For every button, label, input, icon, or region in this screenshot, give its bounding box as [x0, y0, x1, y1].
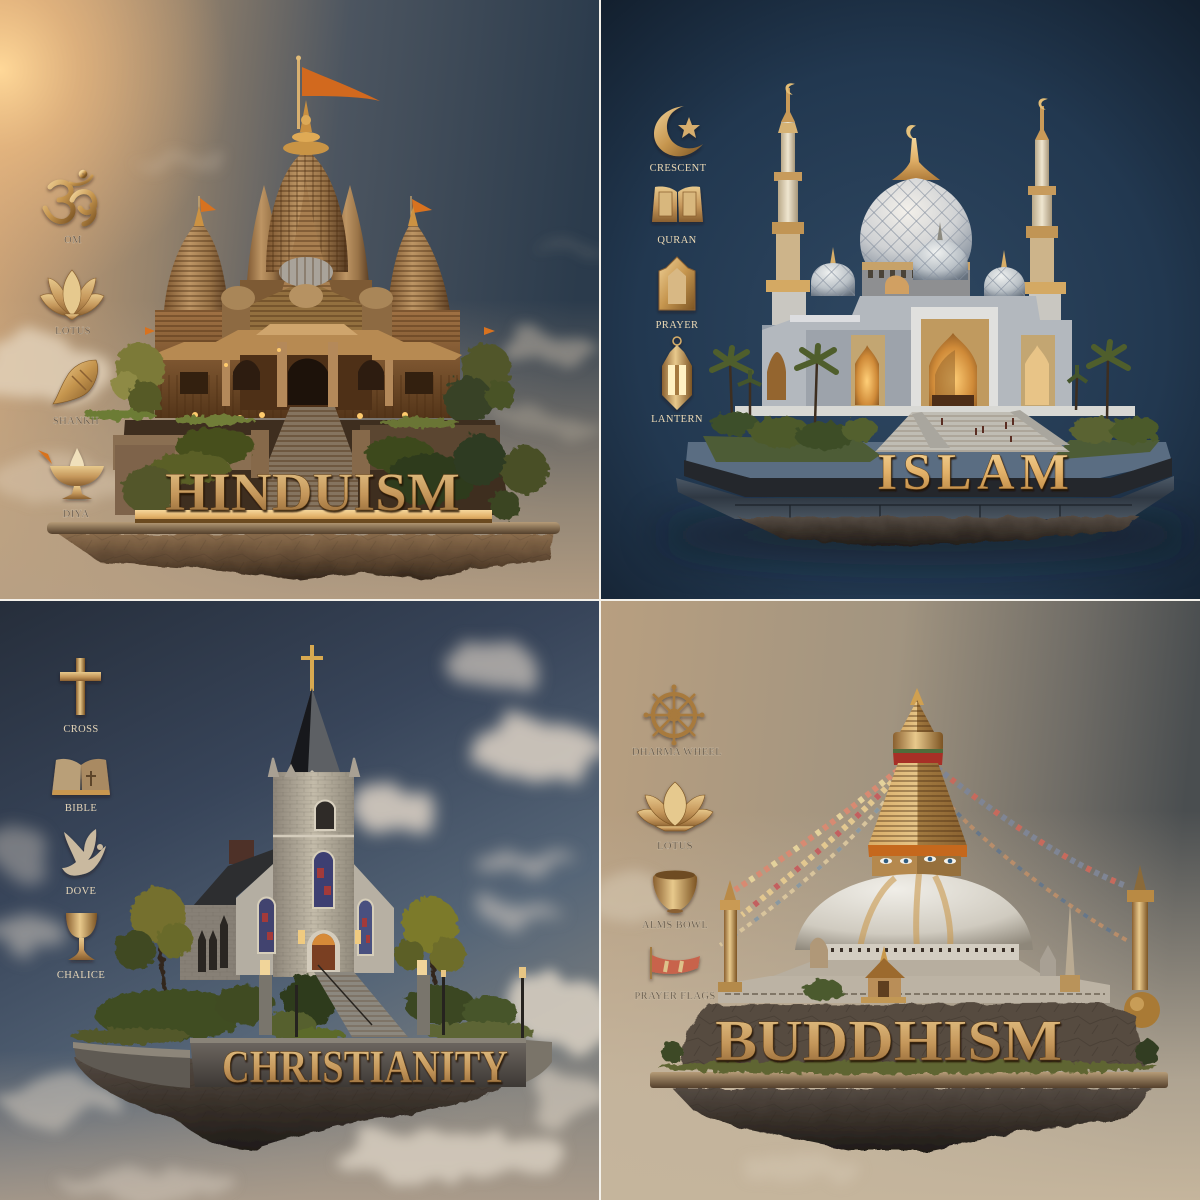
icon: prayer niche: [659, 257, 695, 310]
lamps: [192, 348, 408, 421]
right minaret: [1024, 99, 1066, 324]
panel: Hinduism: [0, 0, 615, 600]
rock island: [650, 1003, 1168, 1150]
night background: [601, 0, 1200, 600]
label: cross: CROSS: [63, 724, 99, 735]
panel: Islam: [601, 0, 1200, 600]
stained glass windows: [258, 851, 373, 955]
label: quran: QURAN: [657, 235, 697, 246]
left and right trees: [112, 343, 515, 424]
label: dharma wheel: DHARMA WHEEL: [632, 747, 722, 758]
side arches: [767, 335, 1055, 410]
floating island: [47, 510, 560, 580]
floating island: [73, 1038, 552, 1150]
church: [70, 645, 535, 1044]
panel: Buddhism: [590, 601, 1200, 1200]
label: om: OM: [64, 235, 82, 246]
label: diya: DIYA: [63, 509, 89, 520]
icon: bible: [52, 759, 110, 795]
icon: prayer flags: [650, 947, 700, 979]
gable left: [236, 853, 285, 975]
icon: quran: [652, 187, 703, 222]
back shikharas: [247, 185, 369, 280]
icon: cross: [60, 658, 101, 715]
finial: [900, 688, 934, 732]
porch roof: [152, 324, 462, 360]
tower cross: [301, 645, 323, 691]
icon: alms bowl: [653, 870, 697, 913]
temple: [84, 56, 549, 520]
lamp posts: [259, 960, 526, 1040]
warm sky: [590, 601, 1200, 1200]
stained glass colours: [262, 868, 370, 943]
pyramid: [868, 763, 967, 857]
label: alms bowl: ALMS BOWL: [642, 920, 708, 931]
island lawns: [703, 436, 1160, 462]
white dome: [795, 874, 1033, 950]
icon: lantern: [662, 337, 692, 410]
label: shankh: SHANKH: [53, 416, 99, 427]
stairs: [251, 407, 370, 510]
central pavilions: [222, 286, 392, 338]
gold ring: [893, 732, 943, 765]
main flag: [296, 56, 380, 129]
main portal: [911, 307, 998, 413]
label: dove: DOVE: [66, 886, 96, 897]
side flags: [145, 196, 495, 335]
main dome: [860, 126, 972, 296]
label: crescent: CRESCENT: [650, 163, 707, 174]
title: CHRISTIANITY: CHRISTIANITY: [222, 1041, 508, 1093]
prayer flag strings: [720, 768, 1130, 945]
left minaret: [766, 84, 810, 342]
label: prayer flags: PRAYER FLAGS: [634, 991, 716, 1002]
icon: chalice: [66, 913, 97, 960]
drum: [768, 938, 1056, 978]
door: [298, 930, 361, 972]
palms: [712, 342, 1128, 423]
nave roof and wall: [180, 840, 287, 980]
base wall: [718, 976, 1110, 1003]
left and right trees: [115, 887, 466, 995]
back tower tiers: [240, 280, 372, 304]
domes: [221, 257, 393, 310]
gardens: [711, 412, 1160, 450]
spire: [288, 688, 340, 782]
label: lotus: LOTUS: [55, 326, 91, 337]
icon: lotus: [40, 270, 104, 320]
icon: shankh: [53, 360, 98, 404]
main shikhara: [266, 100, 348, 272]
icon: lotus flower: [637, 782, 713, 831]
steps: [875, 410, 1070, 452]
title: HINDUISM: HINDUISM: [165, 462, 460, 522]
panel: Christianity: [0, 601, 610, 1200]
icon: crescent and star: [654, 106, 703, 156]
island rock: [738, 517, 1140, 546]
tower: [269, 758, 359, 977]
label: lotus flower: LOTUS: [657, 841, 693, 852]
sky background: [0, 0, 615, 600]
icon: om: [45, 172, 95, 224]
stupa: [718, 688, 1160, 1028]
eye cube: [872, 856, 961, 876]
title: BUDDHISM: BUDDHISM: [715, 1008, 1062, 1073]
icon: dove: [62, 829, 106, 876]
label: lantern: LANTERN: [651, 414, 703, 425]
temple lower body: [155, 310, 460, 418]
lower terrace: [113, 420, 510, 515]
cloudy sky: [0, 601, 610, 1200]
left spire: [164, 206, 226, 310]
balustrade: [735, 406, 1135, 416]
arches and door: [180, 355, 433, 410]
icon: dharma wheel: [644, 684, 704, 746]
right spire: [390, 206, 450, 310]
island tiers: [676, 442, 1174, 519]
shrubs: [84, 410, 549, 520]
shrubs and lawn: [70, 974, 535, 1044]
label: prayer: PRAYER: [656, 320, 698, 331]
icon: diya: [38, 448, 104, 499]
title: ISLAM: ISLAM: [877, 444, 1069, 501]
label: chalice: CHALICE: [57, 970, 105, 981]
label: bible: BIBLE: [65, 803, 97, 814]
stairs: [314, 965, 408, 1037]
mosque body: [762, 296, 1072, 410]
front shikhara: [282, 181, 332, 290]
small domes: [811, 222, 1025, 298]
golden pillars: [718, 865, 1160, 1028]
gable right: [352, 862, 394, 973]
mini pagoda and tree: [803, 903, 1080, 1003]
